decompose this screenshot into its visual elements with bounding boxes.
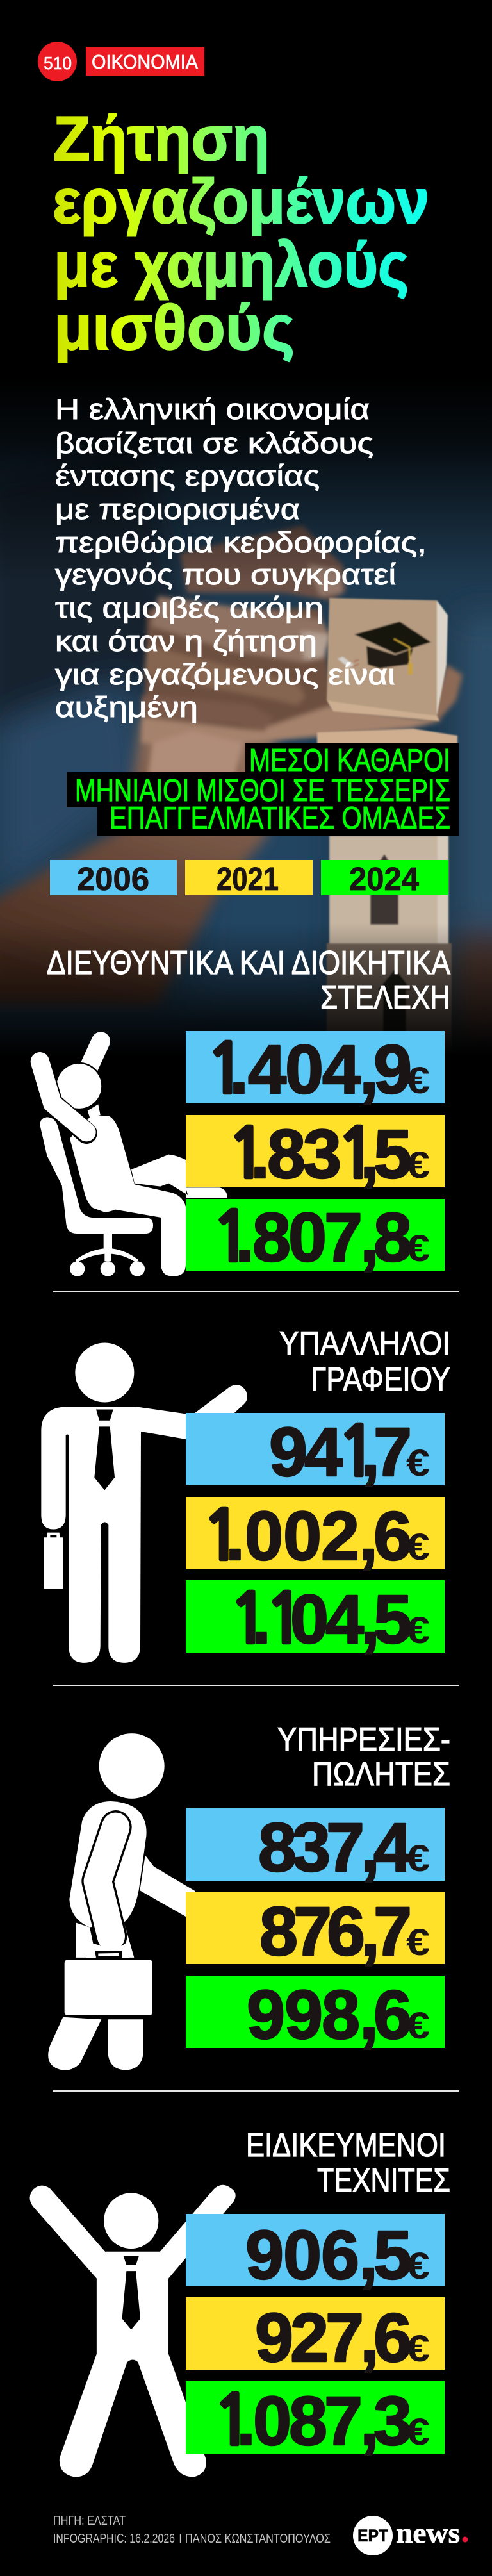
bars: office employees: .002,6 xyxy=(226,1497,412,1574)
icon: salesperson walking with case xyxy=(48,1733,195,2070)
bars: services and sales: 837,4 xyxy=(258,1808,412,1886)
background photo: hand stacking wooden blocks xyxy=(0,378,492,1070)
heading: managers xyxy=(47,945,450,1016)
legend: years xyxy=(50,860,448,897)
intro text: περιθώρια κερδοφορίας, xyxy=(55,526,427,559)
bars: services and sales: € xyxy=(406,2005,430,2047)
intro text: με περιορισμένα xyxy=(55,493,300,525)
bars: managers: 1 xyxy=(211,1203,252,1272)
bars: managers: € xyxy=(406,1144,430,1186)
bars: managers: .83 xyxy=(250,1115,341,1193)
icon: specialised technician with raised arms xyxy=(30,2185,236,2477)
icon: office employee with briefcase xyxy=(41,1342,247,1663)
bars: services and sales: € xyxy=(406,1922,430,1963)
bars: managers: € xyxy=(406,1228,430,1269)
bars: managers: 1 xyxy=(336,1120,377,1189)
bars: office employees: € xyxy=(406,1610,430,1651)
heading: office employees: ΓΡΑΦΕΙΟΥ xyxy=(311,1361,450,1398)
bars: skilled craftsmen: € xyxy=(406,2411,430,2453)
bars: services and sales: € xyxy=(406,1838,430,1879)
bars: office employees: 1 xyxy=(201,1502,243,1571)
heading: skilled craftsmen: ΤΕΧΝΙΤΕΣ xyxy=(317,2162,450,2199)
heading: skilled craftsmen: ΕΙΔΙΚΕΥΜΕΝΟΙ xyxy=(246,2127,446,2164)
title: Ζήτηση xyxy=(53,103,270,174)
heading: skilled craftsmen xyxy=(246,2127,450,2199)
logo: ERT news: ΕΡΤ xyxy=(357,2526,388,2545)
chart subtitle: ΜΕΣΟΙ ΚΑΘΑΡΟΙ xyxy=(249,743,450,778)
bars: managers: 1 xyxy=(226,1120,268,1189)
bars: office employees: ,7 xyxy=(361,1413,412,1490)
source and credit: Ι xyxy=(179,2532,183,2546)
bars: services and sales: 876,7 xyxy=(259,1892,412,1970)
intro text: γεγονός που συγκρατεί xyxy=(55,558,396,591)
bars: managers: 1 xyxy=(205,1036,247,1104)
legend: years: 2021 xyxy=(217,861,279,897)
bars: office employees: 1 xyxy=(228,1585,270,1654)
chart subtitle xyxy=(67,743,459,836)
title: μισθούς xyxy=(54,292,295,363)
bars: managers xyxy=(186,1030,445,1276)
bars: office employees xyxy=(186,1413,445,1658)
bars: office employees: 1 xyxy=(336,1418,378,1487)
bars: skilled craftsmen: € xyxy=(406,2245,430,2287)
intro text: Η ελληνική οικονομία xyxy=(55,393,370,425)
bars: office employees: € xyxy=(406,1526,430,1568)
intro text: αυξημένη xyxy=(55,691,198,723)
bars: office employees: 04,5 xyxy=(290,1580,412,1658)
heading: office employees: ΥΠΑΛΛΗΛΟΙ xyxy=(279,1325,450,1362)
intro text: και όταν η ζήτηση xyxy=(55,625,317,657)
title xyxy=(53,103,429,363)
bars: managers: € xyxy=(406,1060,430,1102)
bars: skilled craftsmen xyxy=(186,2214,445,2459)
bars: office employees: 1 xyxy=(264,1585,306,1654)
bars: managers: .807,8 xyxy=(235,1198,412,1276)
heading: services and sales: ΠΩΛΗΤΕΣ xyxy=(312,1756,450,1793)
bars: skilled craftsmen: .087,3 xyxy=(236,2382,412,2459)
source and credit: INFOGRAPHIC: 16.2.2026 xyxy=(53,2532,175,2546)
source and credit: ΠΗΓΗ: ΕΛΣΤΑΤ xyxy=(53,2514,126,2528)
intro text: τις αμοιβές ακόμη xyxy=(55,591,324,624)
legend: years: 2024 xyxy=(349,861,420,897)
title: εργαζομένων xyxy=(53,166,429,236)
bars: services and sales xyxy=(186,1808,445,2053)
intro text: για εργαζόμενους είναι xyxy=(55,658,395,691)
bars: office employees: € xyxy=(406,1442,430,1484)
hand and fingers xyxy=(138,524,465,772)
source and credit: ΠΑΝΟΣ ΚΩΝΣΤΑΝΤΟΠΟΥΛΟΣ xyxy=(185,2532,331,2546)
bars: skilled craftsmen: € xyxy=(406,2328,430,2370)
bars: office employees: 94 xyxy=(269,1413,343,1490)
bars: managers: .404,9 xyxy=(229,1030,412,1108)
title: με χαμηλούς xyxy=(54,229,409,300)
heading: managers: ΣΤΕΛΕΧΗ xyxy=(320,979,450,1016)
intro text xyxy=(55,393,427,723)
bars: skilled craftsmen: 906,5 xyxy=(245,2216,412,2293)
badge: 510: 510 xyxy=(44,53,72,73)
logo: ERT news xyxy=(353,2516,468,2555)
intro text: έντασης εργασίας xyxy=(55,459,320,492)
bars: skilled craftsmen: 927,6 xyxy=(255,2299,412,2376)
source and credit xyxy=(53,2514,331,2546)
bars: skilled craftsmen: 1 xyxy=(212,2387,254,2456)
heading: services and sales: ΥΠΗΡΕΣΙΕΣ- xyxy=(277,1721,450,1758)
badge: category: ΟΙΚΟΝΟΜΙΑ xyxy=(92,51,198,73)
bars: office employees: . xyxy=(252,1580,271,1658)
heading: services and sales xyxy=(277,1721,450,1793)
bars: managers: ,5 xyxy=(360,1115,412,1193)
wooden block with graduation cap xyxy=(317,598,457,1055)
icon: man reclining in office chair xyxy=(40,1041,227,1276)
bars: services and sales: 998,6 xyxy=(247,1976,412,2053)
logo: ERT news: news xyxy=(396,2516,460,2549)
intro text: βασίζεται σε κλάδους xyxy=(55,427,373,459)
heading: office employees xyxy=(279,1325,450,1398)
badge: 510 xyxy=(38,42,77,81)
legend: years: 2006 xyxy=(77,861,149,897)
